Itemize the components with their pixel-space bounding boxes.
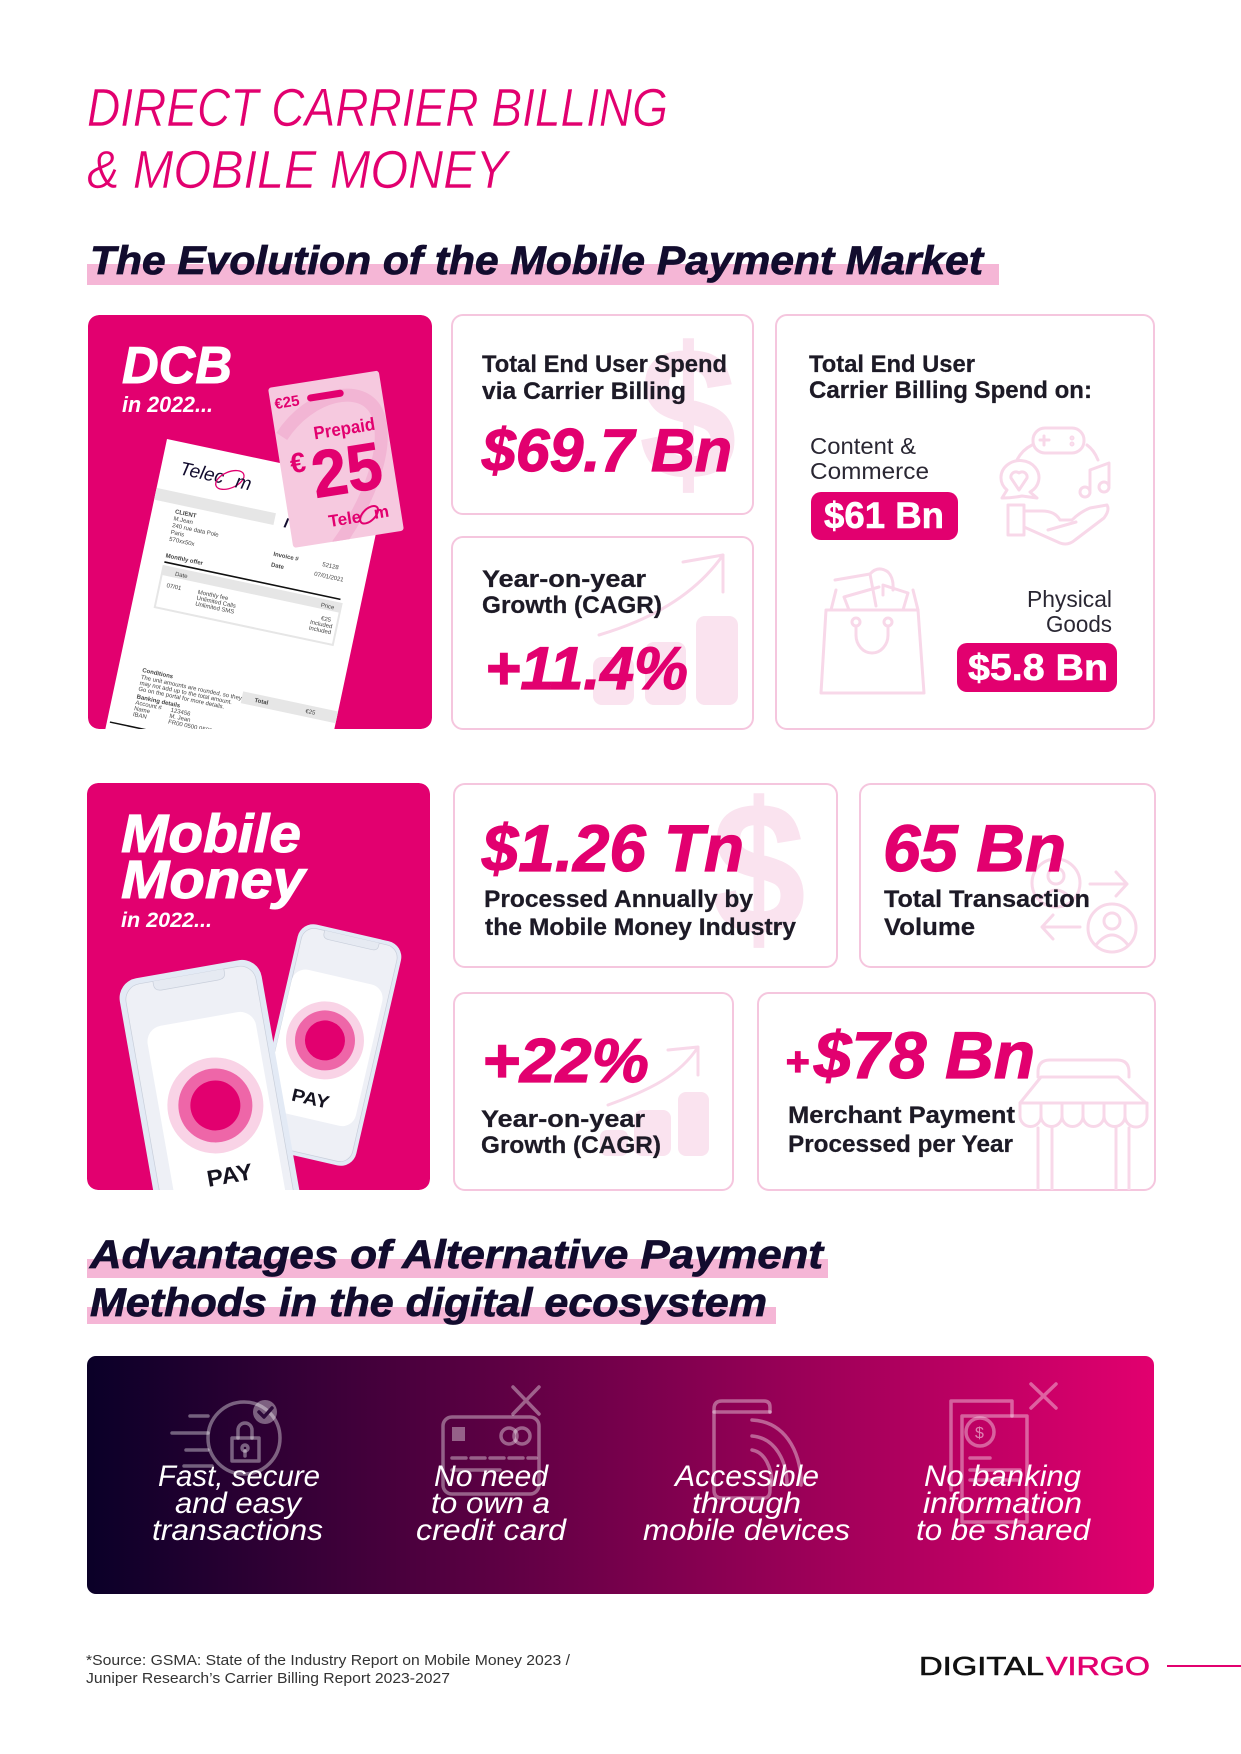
value: 65 Bn: 65 Bn — [883, 811, 1066, 885]
label: merchant payment: Processed per Year — [788, 1131, 1013, 1158]
icon: users exchange — [1032, 859, 1136, 952]
heading: spend breakdown: Total End User — [809, 351, 975, 378]
panel: mobile money — [87, 783, 430, 1190]
icon: padlock — [172, 1400, 280, 1474]
text: no banking: No banking — [924, 1460, 1081, 1493]
label: growth: Year-on-year — [481, 1106, 645, 1133]
icon: document: $ — [975, 1425, 984, 1442]
label: physical goods: Goods — [1046, 611, 1112, 637]
illustration: invoice: 570xx50x — [168, 537, 195, 548]
text: accessible: mobile devices — [643, 1514, 850, 1547]
source note — [86, 1652, 571, 1687]
text: no banking: to be shared — [916, 1514, 1091, 1547]
illustration: invoice: Name — [134, 706, 151, 715]
illustration: prepaid card: m — [372, 502, 390, 523]
icon: credit card — [443, 1387, 539, 1494]
label: merchant payment — [788, 1102, 1015, 1158]
label: content and commerce: Content & — [810, 433, 916, 459]
text: fast, secure: Fast, secure — [158, 1460, 320, 1493]
illustration: invoice: €25 — [305, 709, 316, 717]
panel: DCB growth — [452, 537, 753, 729]
label: growth — [481, 1106, 661, 1159]
value: +11.4%: +11.4% — [485, 635, 688, 702]
mobile money heading — [121, 804, 308, 910]
illustration: prepaid card: Tele — [327, 507, 363, 531]
illustration: prepaid card: € — [288, 446, 308, 479]
label: merchant payment: Merchant Payment — [788, 1102, 1015, 1129]
icon: shopping bag — [821, 569, 924, 693]
heading: advantages: Advantages of Alternative Payment — [89, 1233, 825, 1277]
mobile money subheading: in 2022... — [121, 909, 212, 932]
illustration: invoice: 123456 — [170, 708, 191, 718]
illustration: invoice: CLIENT — [174, 509, 197, 520]
illustration: invoice: Included — [308, 626, 331, 636]
illustration: invoice: Account # — [135, 700, 163, 712]
label: transaction volume — [884, 886, 1090, 941]
illustration: invoice: 07/01/2021 — [313, 572, 345, 584]
illustration: invoice: may not add up to the total amount. — [139, 681, 233, 706]
icon: shop — [1020, 1060, 1147, 1195]
value badge: $5.8 Bn — [957, 643, 1117, 692]
illustration: invoice: €25 — [320, 616, 332, 624]
panel: merchant payment — [758, 993, 1155, 1195]
heading: advantages: Methods in the digital ecosystem — [90, 1281, 767, 1325]
text: fast, secure: transactions — [152, 1514, 323, 1547]
illustration: invoice: I — [283, 514, 291, 531]
heading: spend breakdown: Carrier Billing Spend on: — [809, 377, 1092, 404]
text: fast, secure: and easy — [175, 1487, 303, 1520]
illustration: invoice: Conditions — [142, 668, 174, 681]
illustration: invoice: FR00 0500 0500 0500 — [167, 719, 228, 738]
label: transaction volume: Total Transaction — [884, 886, 1090, 913]
panel: spend breakdown — [776, 315, 1154, 729]
text: accessible: through — [692, 1487, 801, 1520]
illustration: invoice: Total — [254, 698, 269, 707]
text: no need: No need — [434, 1460, 549, 1493]
value badge: $61 Bn: $61 Bn — [824, 495, 944, 536]
illustration: invoice: Unlimited SMS — [195, 602, 235, 616]
label: growth: Growth (CAGR) — [482, 592, 662, 619]
title: & MOBILE MONEY — [87, 140, 512, 200]
text: accessible: Accessible — [673, 1460, 819, 1493]
panel: transaction volume — [860, 784, 1155, 967]
label: total spend: via Carrier Billing — [482, 378, 686, 405]
icon: phone and contactless waves — [714, 1401, 801, 1498]
illustration: invoice: Banking details — [136, 694, 181, 710]
icon: growth chart — [600, 1047, 709, 1156]
text: no need — [416, 1460, 567, 1547]
illustration: invoice: Go on the portal for more details. — [138, 687, 225, 711]
illustration: invoice: 52128 — [322, 562, 340, 572]
label: total spend: Total End User Spend — [482, 351, 727, 378]
DCB subheading: in 2022... — [122, 392, 213, 417]
value: $69.7 Bn: $69.7 Bn — [481, 417, 732, 484]
illustration: prepaid card: 25 — [306, 428, 387, 512]
panel: mobile money growth — [454, 993, 733, 1190]
illustration: invoice: Monthly fee — [197, 590, 229, 602]
label: growth — [482, 566, 662, 619]
heading: evolution of the mobile payment market: The Evolution of the Mobile Payment Market — [90, 239, 985, 283]
label: transaction volume: Volume — [884, 914, 975, 941]
illustration: invoice: Invoice # — [273, 552, 300, 563]
illustration: front phone — [120, 960, 300, 1190]
label: content and commerce: Commerce — [810, 458, 929, 484]
logo: Digital Virgo: DIGITAL — [919, 1651, 1044, 1681]
logo: Digital Virgo: VIRGO — [1046, 1651, 1150, 1681]
title — [87, 78, 668, 200]
title: DIRECT CARRIER BILLING — [87, 78, 668, 138]
illustration: invoice — [105, 439, 376, 729]
icon: growth chart — [593, 555, 738, 705]
illustration: invoice: Telec — [178, 459, 226, 489]
value badge: $5.8 Bn: $5.8 Bn — [968, 647, 1108, 688]
heading: spend breakdown — [809, 351, 1092, 404]
panel: DCB — [88, 315, 432, 729]
illustration: invoice: Included — [309, 620, 333, 630]
illustration: invoice: 07/01 — [166, 583, 182, 592]
illustration: invoice: Unlimited Calls — [196, 596, 236, 610]
text: no banking: information — [923, 1487, 1082, 1520]
text: no need: credit card — [416, 1514, 567, 1547]
illustration: invoice: Monthly offer — [165, 553, 204, 567]
illustration: prepaid card: €25 — [273, 392, 301, 413]
illustration: prepaid card: Prepaid — [312, 414, 376, 443]
panel: processed annually — [454, 764, 837, 973]
illustration: invoice: IBAN — [132, 712, 147, 721]
value: +22%: +22% — [482, 1027, 649, 1096]
label: growth: Year-on-year — [482, 566, 646, 593]
illustration: back phone: PAY — [290, 1085, 331, 1113]
illustration: invoice: Price — [320, 603, 335, 612]
label: processed annually — [484, 886, 797, 941]
text: fast, secure — [152, 1460, 323, 1547]
label: physical goods: Physical — [1027, 586, 1112, 612]
icon: dollar watermark: $ — [640, 309, 736, 518]
illustration: invoice: Date — [270, 562, 285, 571]
heading: advantages — [87, 1233, 828, 1325]
illustration: front phone: PAY — [205, 1158, 255, 1192]
illustration: invoice: Date — [174, 572, 189, 580]
panel: total spend — [452, 309, 753, 518]
illustration: invoice: 240 rue data Pole — [171, 523, 220, 539]
value: +$78 Bn: + — [785, 1040, 809, 1084]
text: no banking — [916, 1460, 1091, 1547]
icon: gamepad, heart, music and hand — [1001, 428, 1109, 544]
mobile money heading: Mobile — [121, 804, 301, 864]
panel: advantages banner — [87, 1356, 1154, 1594]
icon: dollar watermark: $ — [712, 764, 805, 973]
mobile money heading: Money — [121, 850, 308, 910]
illustration: invoice: m — [233, 471, 253, 495]
illustration: prepaid card — [268, 370, 405, 552]
illustration: invoice: The unit amounts are rounded, so they — [140, 675, 242, 702]
icon: document — [951, 1384, 1056, 1522]
value: $1.26 Tn: $1.26 Tn — [481, 811, 744, 885]
source note: Juniper Research’s Carrier Billing Report 2023-2027 — [86, 1670, 450, 1687]
label: processed annually: the Mobile Money Industry — [485, 914, 797, 941]
illustration: invoice: Paris — [170, 530, 185, 539]
label: growth: Growth (CAGR) — [481, 1132, 661, 1159]
illustration: invoice: M.Jean — [173, 516, 193, 526]
label: processed annually: Processed Annually by — [484, 886, 754, 913]
label: total spend — [482, 351, 727, 405]
text: accessible — [643, 1460, 850, 1547]
source note: *Source: GSMA: State of the Industry Report on Mobile Money 2023 / — [86, 1652, 571, 1669]
label: physical goods — [1027, 586, 1112, 637]
illustration: invoice: M. Jean — [169, 714, 191, 724]
logo: Digital Virgo — [919, 1651, 1241, 1681]
label: content and commerce — [810, 433, 929, 484]
illustration: back phone — [273, 924, 402, 1166]
DCB heading: DCB — [122, 337, 232, 395]
text: no need: to own a — [431, 1487, 550, 1520]
value: +$78 Bn: $78 Bn — [813, 1018, 1035, 1092]
